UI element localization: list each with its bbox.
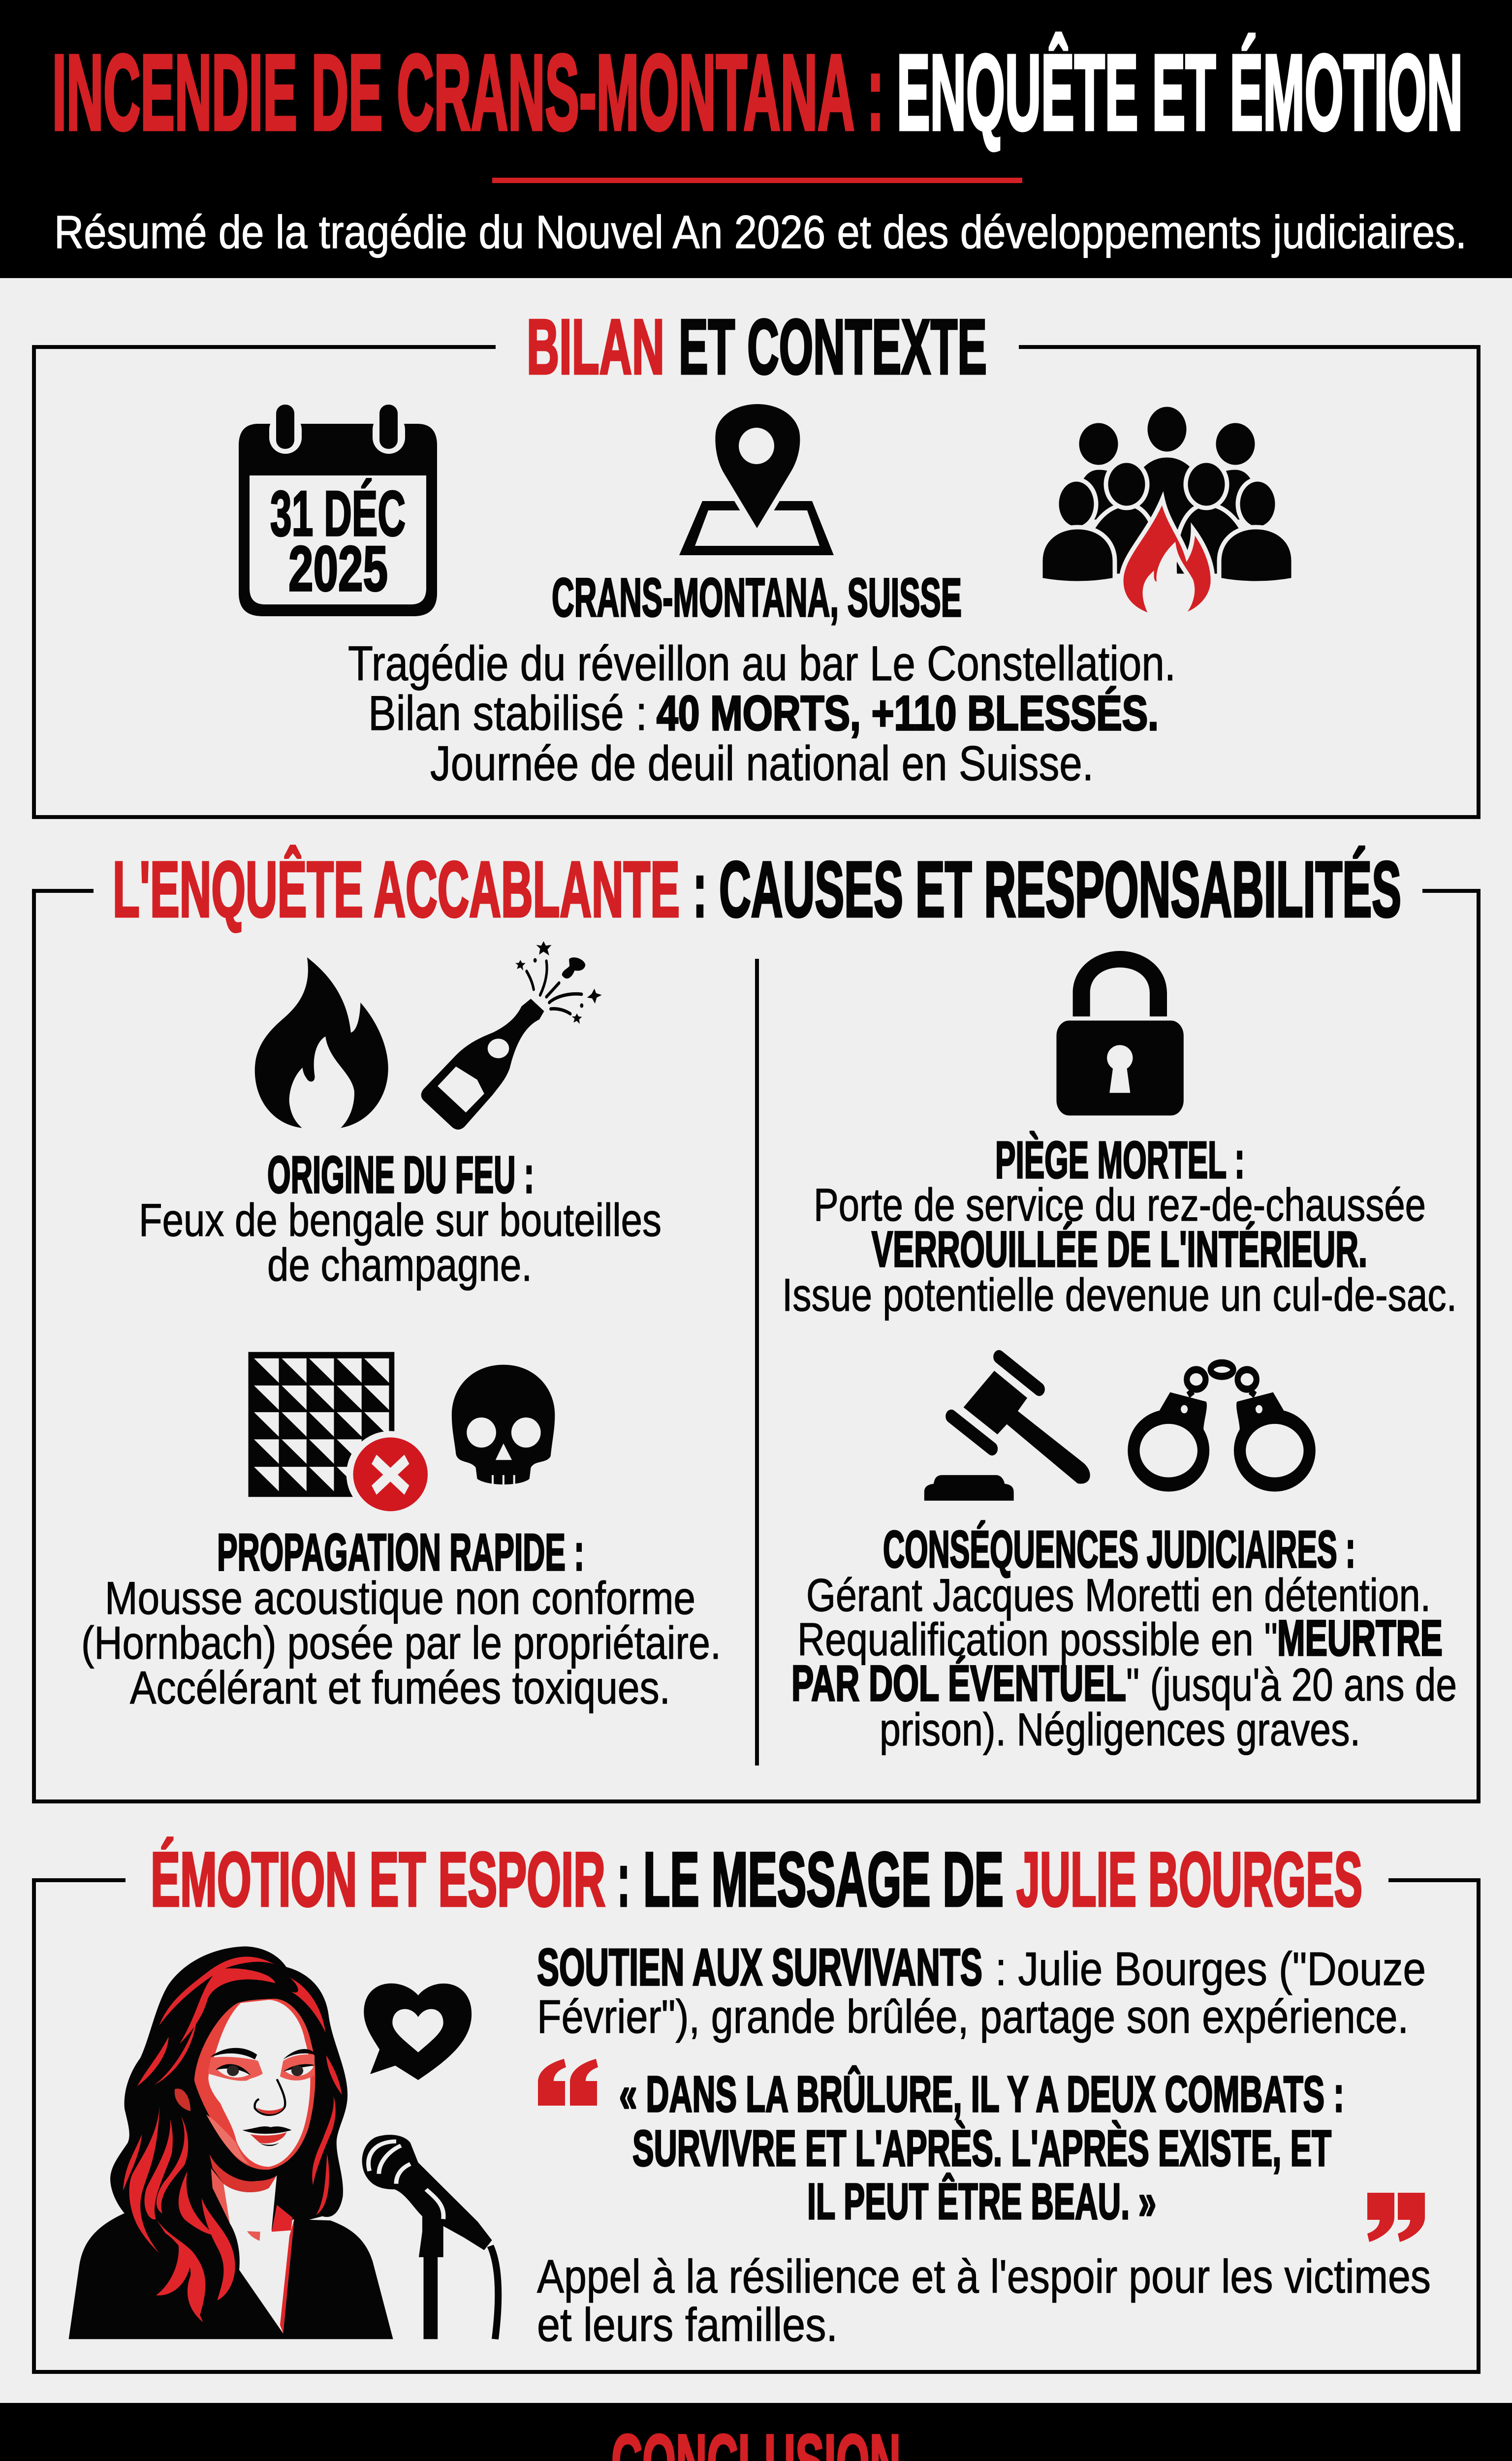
icon: padlock [1056,951,1184,1115]
heading: bilan et contexte [527,304,987,390]
icon: map pin [679,404,834,555]
icon: skull [452,1365,555,1485]
text: quotation [619,2065,1344,2230]
text: soutien aux survivants: : Julie Bourges ("Douze [995,1943,1426,1995]
text: bilan: Bilan stabilisé : [368,686,647,740]
text: conséquences judiciaires: prison). Négligences graves. [880,1704,1360,1755]
text: propagation rapide: PROPAGATION RAPIDE : [217,1523,584,1581]
text: soutien aux survivants: SOUTIEN AUX SURVIVANTS [537,1938,982,1996]
header band [0,0,1512,278]
icon: non-compliant foam [249,1352,435,1517]
calendar date: 31 DÉC [270,477,406,549]
text: origine du feu: ORIGINE DU FEU : [267,1146,534,1204]
panel: enquête [34,845,1479,1801]
text: origine du feu [139,1146,662,1291]
heading: enquête: L'ENQUÊTE ACCABLANTE [113,845,680,933]
text: conséquences judiciaires: PAR DOL ÉVENTUEL [791,1655,1126,1711]
text: quotation: IL PEUT ÊTRE BEAU. » [807,2173,1156,2230]
icon: gavel [924,1357,1090,1501]
text: propagation rapide: Accélérant et fumées toxiques. [130,1662,670,1713]
text: piège mortel [782,1131,1457,1321]
text: bilan: Journée de deuil national en Suisse. [430,736,1094,790]
panel: bilan et contexte [34,304,1479,817]
icon: calendar [239,405,437,616]
text: propagation rapide [81,1523,721,1713]
text: bilan: Tragédie du réveillon au bar Le Constellation. [348,636,1176,691]
text: origine du feu: Feux de bengale sur bouteilles [139,1194,662,1246]
icon: heart speech bubble [364,1984,472,2080]
heading: émotion et espoir [151,1837,1362,1923]
icon: microphone [362,2135,498,2339]
heading: bilan et contexte: ET CONTEXTE [679,304,987,390]
text: origine du feu: de champagne. [267,1239,532,1291]
icon: handcuffs [1134,1363,1310,1484]
text: propagation rapide: Mousse acoustique non conforme [105,1572,695,1624]
text: appel à la résilience [537,2250,1431,2351]
text: piège mortel: PIÈGE MORTEL : [995,1131,1245,1189]
icon: flame [255,957,388,1128]
heading: émotion et espoir: ÉMOTION ET ESPOIR [151,1837,605,1923]
calendar date [270,477,406,604]
text: conséquences judiciaires: Requalification possible en " [797,1613,1278,1665]
icon: crowd and flame [1040,405,1293,616]
text: bilan [348,636,1176,790]
quote mark: opening [538,2059,598,2106]
eyes nose lips [175,2048,315,2146]
heading: bilan et contexte: BILAN [527,304,664,390]
calendar date: 2025 [288,533,388,604]
label: crans-montana: CRANS-MONTANA, SUISSE [552,568,962,628]
text: appel à la résilience: et leurs familles. [537,2299,838,2351]
text: bilan: 40 MORTS, +110 BLESSÉS. [657,686,1159,740]
icon: champagne bottle [421,941,602,1130]
text: propagation rapide: (Hornbach) posée par le propriétaire. [81,1617,721,1669]
heading: émotion et espoir: LE MESSAGE DE [643,1837,1004,1923]
panel: conclusion [0,2403,1512,2461]
quote mark: closing [1367,2193,1425,2242]
heading: émotion et espoir: : [617,1837,630,1923]
heading: enquête: : [693,845,707,933]
text: soutien aux survivants [537,1938,1426,2043]
illustration: julie bourges portrait [69,1947,393,2339]
text: conséquences judiciaires [791,1520,1457,1755]
face [194,1999,315,2334]
panel: émotion et espoir [34,1837,1479,2372]
